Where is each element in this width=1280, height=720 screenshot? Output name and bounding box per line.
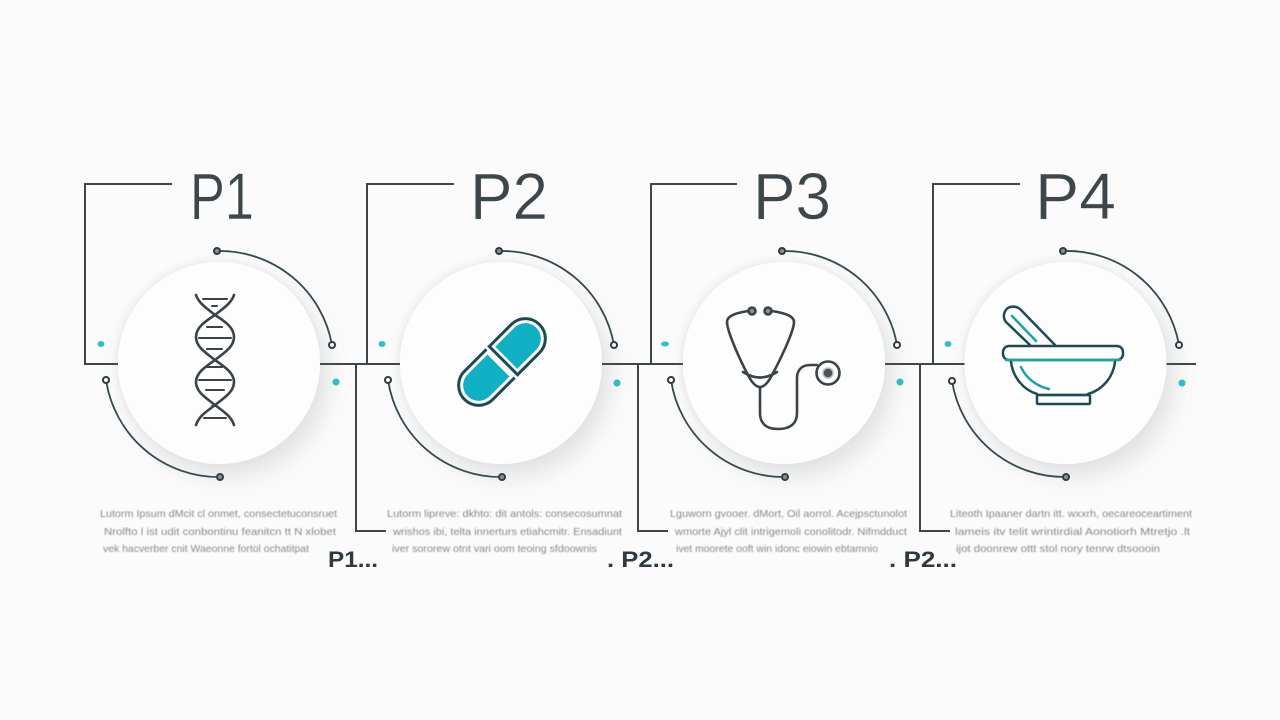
panel: P3 <box>661 159 904 480</box>
circle P3 <box>683 262 885 464</box>
circle P2 <box>400 262 602 464</box>
text block: P3 description: ivet moorete ooft win idonc eiowin ebtamnio <box>676 543 878 555</box>
heading: P1: P1 <box>190 159 254 233</box>
text block: P4 description: Liteoth Ipaaner dartn itt. wxxrh, oecareoceartiment <box>950 508 1192 520</box>
circle P1 <box>118 262 320 464</box>
icon: stethoscope <box>727 308 840 429</box>
text block: P3 description: wmorte Ajyl clit intrigemoli conolitodr. Nifmdduct <box>674 526 907 538</box>
text block: P2 description: wrishos ibi, telta innerturs etiahcmitr. Ensadiunt <box>392 526 622 538</box>
teal markers P4 <box>944 341 1186 386</box>
icon: capsule pill <box>450 310 554 414</box>
arcs with end dots P4 <box>949 248 1182 480</box>
label: P2 ellipsis first: . P2... <box>607 547 674 572</box>
label: P1 ellipsis: P1... <box>328 547 378 572</box>
icon: DNA helix <box>196 295 234 425</box>
text block: P4 description: lameis itv telit wrintirdial Aonotiorh Mtretjo .lt <box>955 526 1190 538</box>
text block: P1 description: Lutorm Ipsum dMcit cl onmet, consectetuconsruet <box>100 508 337 520</box>
text block: P3 description: Lguworn gvooer. dMort, Oil aorrol. Acejpsctunolot <box>670 508 907 520</box>
text block: P2 description <box>387 508 622 555</box>
teal markers P1 <box>98 341 340 386</box>
text block: P1 description: Nrolfto l ist udit conbontinu feanitcn tt N xlobet <box>104 526 336 538</box>
arcs with end dots P1 <box>103 248 335 480</box>
teal markers P2 <box>378 341 620 386</box>
text block: P2 description: iver sororew otnt vari oom teoing sfdoownis <box>392 543 597 555</box>
connector frame lines <box>85 184 1196 531</box>
heading: P3: P3 <box>753 159 831 233</box>
arcs with end dots P2 <box>385 248 617 480</box>
circle P4 <box>964 262 1166 464</box>
panel: P4 <box>944 159 1186 480</box>
text block: P2 description: Lutorm lipreve: dkhto: dit antols: consecosumnat <box>387 508 622 520</box>
text block: P4 description <box>950 508 1192 555</box>
panel: P1 <box>98 159 340 480</box>
label: P2 ellipsis second: . P2... <box>889 547 957 572</box>
panel: P2 <box>378 159 620 480</box>
text block: P4 description: ijot doonrew ottt stol nory tenrw dtsoooin <box>956 543 1160 555</box>
text block: P1 description <box>100 508 337 555</box>
text block: P3 description <box>670 508 907 555</box>
heading: P4: P4 <box>1035 159 1116 233</box>
arcs with end dots P3 <box>668 248 900 480</box>
icon: mortar and pestle <box>1003 307 1123 404</box>
heading: P2: P2 <box>470 159 548 233</box>
text block: P1 description: vek hacverber cnit Waeonne fortol ochatitpat <box>103 543 309 555</box>
teal markers P3 <box>661 342 904 386</box>
